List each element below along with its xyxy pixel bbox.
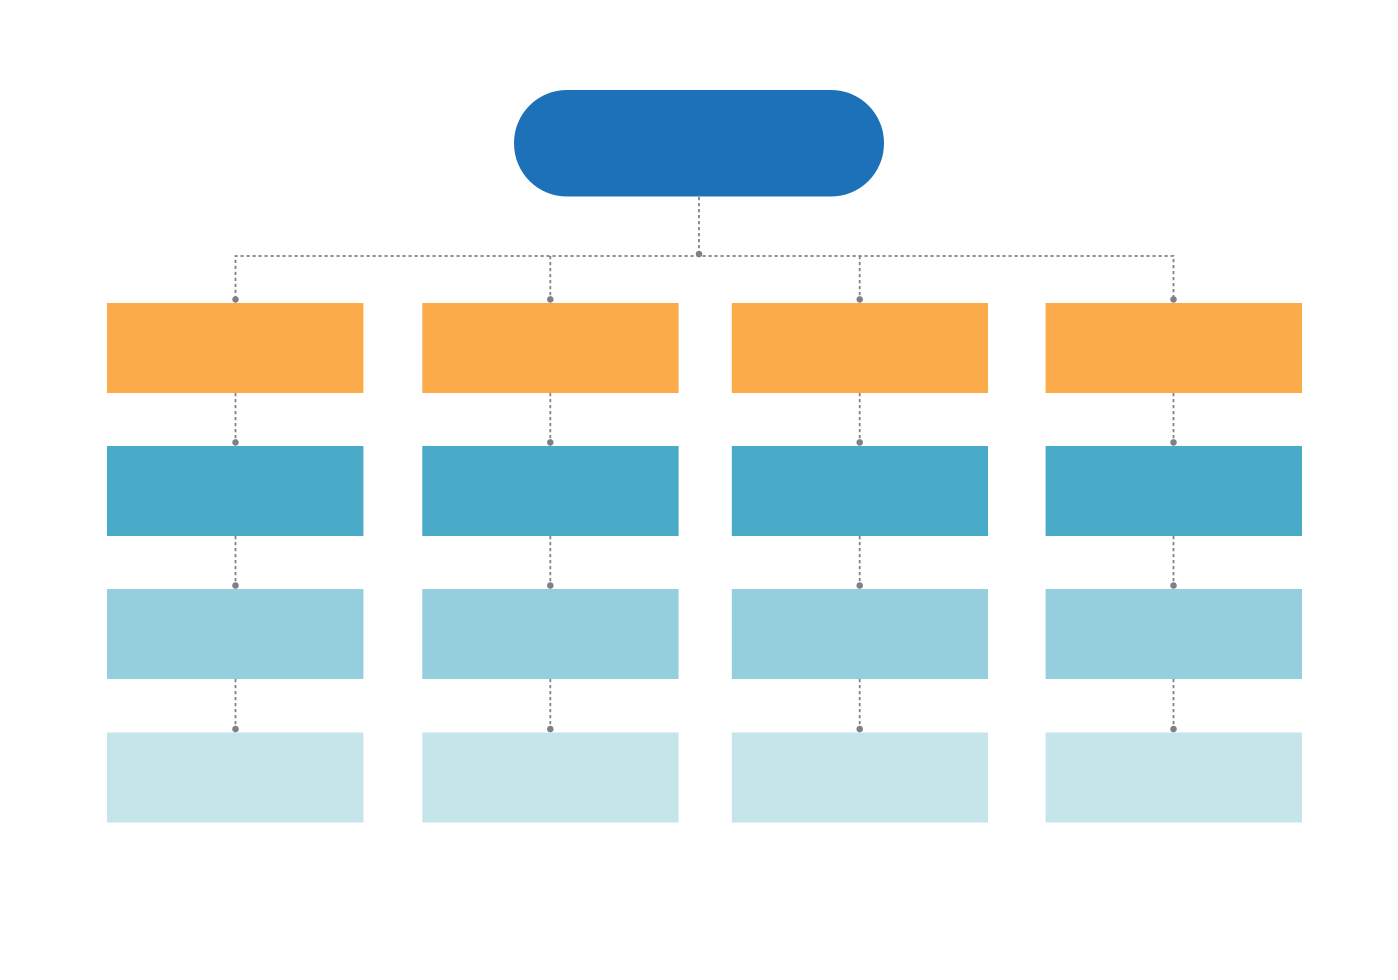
box: column 4 level 1 (1046, 303, 1302, 393)
box: column 4 level 2 (1046, 446, 1302, 536)
box: column 2 level 4 (422, 732, 679, 822)
connectors: column 3 (856, 393, 863, 732)
box: column 1 level 2 (107, 446, 363, 536)
box: column 1 level 4 (107, 732, 363, 822)
column 4 (1046, 303, 1302, 822)
box: column 3 level 1 (732, 303, 988, 393)
column 3 (732, 303, 988, 822)
box: column 2 level 3 (422, 589, 679, 679)
connectors: root to columns (232, 197, 1177, 303)
connectors: column 2 (547, 393, 554, 732)
box: column 3 level 4 (732, 732, 988, 822)
box: column 2 level 1 (422, 303, 679, 393)
box: column 1 level 3 (107, 589, 363, 679)
connectors: column 4 (1170, 393, 1177, 732)
root node (514, 90, 884, 196)
column 2 (422, 303, 679, 822)
box: column 3 level 3 (732, 589, 988, 679)
box: column 1 level 1 (107, 303, 363, 393)
column 1 (107, 303, 363, 822)
connectors: column 1 (232, 393, 239, 732)
box: column 2 level 2 (422, 446, 679, 536)
box: column 3 level 2 (732, 446, 988, 536)
box: column 4 level 4 (1046, 732, 1302, 822)
box: column 4 level 3 (1046, 589, 1302, 679)
